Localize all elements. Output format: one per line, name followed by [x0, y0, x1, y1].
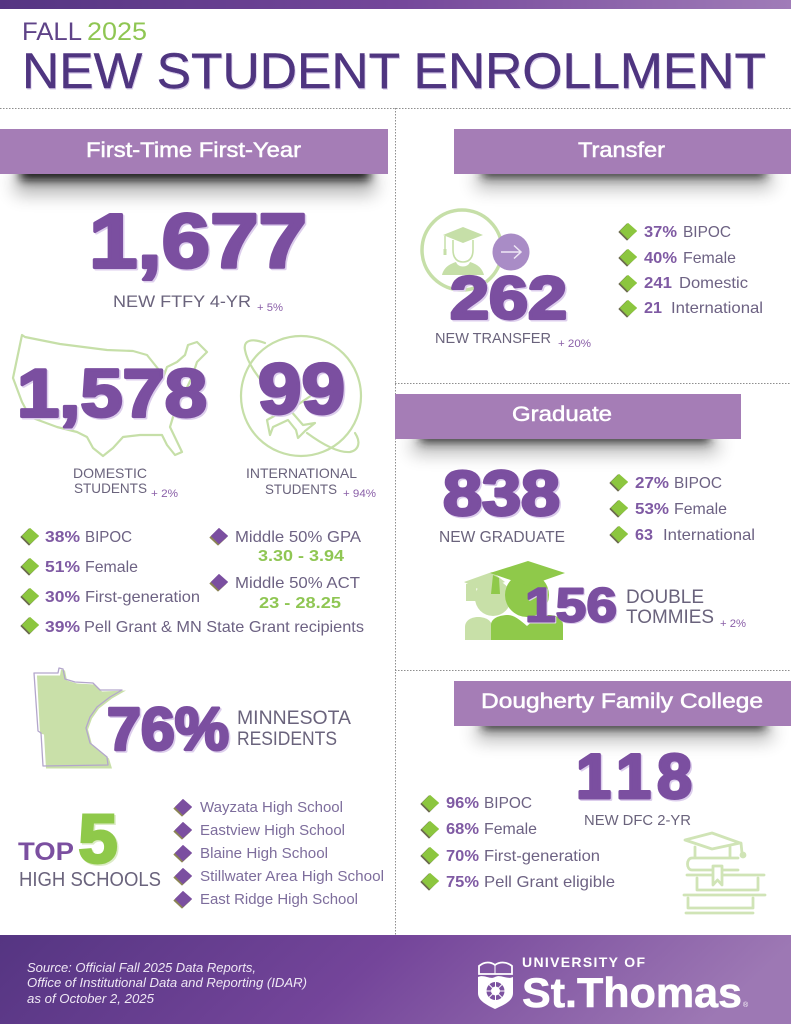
- label: domestic students: + 2%: [151, 488, 178, 500]
- icon: Minnesota map: [34, 668, 126, 768]
- stat list: transfer: 21: [644, 300, 662, 317]
- logo: University of St. Thomas: UNIVERSITY OF: [522, 954, 645, 970]
- logo: University of St. Thomas: [478, 954, 749, 1016]
- panel: first-time first-year: [0, 129, 388, 908]
- stat: middle 50% GPA and ACT: [210, 528, 361, 612]
- stat list: DFC: 96%: [446, 795, 479, 812]
- number 838: 838: [444, 460, 562, 530]
- stat list: DFC: 75%: [446, 874, 479, 891]
- label: new transfer: NEW TRANSFER: [435, 330, 551, 347]
- icon: graduate in circle: [422, 210, 502, 290]
- panel: transfer: [422, 129, 791, 350]
- stat list: demographics: Female: [85, 559, 138, 576]
- title: [22, 18, 767, 100]
- stat: 156 double tommies: 156: [525, 580, 617, 632]
- logo: University of St. Thomas: St.Thomas: [522, 969, 742, 1016]
- label: new graduate: NEW GRADUATE: [439, 529, 565, 546]
- section heading: Transfer: Transfer: [578, 139, 665, 162]
- stat list: demographics: 38%: [45, 529, 80, 546]
- label: new transfer: [435, 330, 591, 350]
- label: new FTFY: [113, 293, 283, 314]
- stat list: transfer: Domestic: [679, 275, 748, 292]
- stat list: demographics: Pell Grant & MN State Grant recipients: [84, 619, 364, 636]
- stat list: transfer: BIPOC: [683, 224, 731, 241]
- stat: 76% Minnesota residents: 76%: [108, 697, 230, 764]
- stat list: graduate: [610, 474, 755, 544]
- stat list: graduate: BIPOC: [674, 475, 722, 492]
- icon: two graduates: [464, 561, 565, 640]
- stat: 156 double tommies: 156: [526, 580, 618, 634]
- panel: graduate: [395, 394, 755, 640]
- source note: Source: Official Fall 2025 Data Reports,: [27, 960, 256, 975]
- label: new transfer: + 20%: [558, 338, 591, 350]
- number 838: 838: [443, 459, 560, 529]
- stat list: demographics: 39%: [45, 619, 80, 636]
- stat list: DFC: BIPOC: [484, 795, 532, 812]
- source note: as of October 2, 2025: [27, 991, 155, 1006]
- icon: arrow circle: [492, 234, 530, 270]
- stat list: DFC: Female: [484, 821, 537, 838]
- heading: top 5 high schools: 5: [80, 802, 119, 879]
- top banner: [0, 0, 791, 9]
- title: 2025: [87, 18, 147, 46]
- stat: middle 50% GPA and ACT: 23 - 28.25: [259, 595, 341, 612]
- stat: 156 double tommies: + 2%: [720, 618, 746, 630]
- title: NEW STUDENT ENROLLMENT: [22, 43, 766, 99]
- section heading: First-Time First-Year: First-Time First-Year: [86, 139, 301, 162]
- label: international students: + 94%: [343, 488, 376, 500]
- title: FALL: [22, 18, 82, 46]
- headline number 1,677: 1,677: [90, 200, 308, 286]
- number 99: 99: [258, 350, 345, 430]
- section heading: Graduate: [395, 394, 741, 453]
- stat list: transfer: 40%: [644, 250, 677, 267]
- label: international students: STUDENTS: [265, 481, 337, 497]
- stat: middle 50% GPA and ACT: 3.30 - 3.94: [258, 548, 344, 565]
- stat list: graduate: Female: [674, 501, 727, 518]
- stat list: transfer: [619, 224, 763, 317]
- number 1,578: 1,578: [18, 357, 208, 433]
- stat list: graduate: International: [663, 527, 755, 544]
- section heading: Graduate: Graduate: [512, 403, 612, 426]
- list: high schools: Eastview High School: [200, 822, 345, 839]
- heading: top 5 high schools: HIGH SCHOOLS: [19, 869, 161, 891]
- icon: US map outline: [13, 335, 207, 456]
- title: NEW STUDENT ENROLLMENT: [23, 44, 767, 100]
- stat list: transfer: Female: [683, 250, 736, 267]
- source note: Office of Institutional Data and Reporting (IDAR): [27, 975, 307, 990]
- stat list: graduate: 53%: [635, 501, 669, 518]
- section heading: Dougherty Family College: [454, 681, 791, 740]
- number 1,578: 1,578: [17, 356, 207, 432]
- icon: shield: [478, 962, 513, 1009]
- stat list: DFC: [421, 795, 615, 891]
- label: domestic students: DOMESTIC: [73, 465, 147, 481]
- number 118: 118: [578, 744, 694, 814]
- label: international students: [246, 465, 376, 500]
- heading: top 5 high schools: [18, 800, 161, 891]
- stat list: DFC: 70%: [446, 848, 479, 865]
- stat: 76% Minnesota residents: 76%: [107, 696, 229, 762]
- heading: top 5 high schools: 5: [78, 800, 118, 878]
- stat list: DFC: First-generation: [484, 848, 600, 865]
- stat: 76% Minnesota residents: [107, 696, 351, 764]
- stat: middle 50% GPA and ACT: Middle 50% GPA: [235, 529, 361, 546]
- stat: middle 50% GPA and ACT: Middle 50% ACT: [235, 575, 360, 592]
- number 262: 262: [450, 264, 567, 332]
- list: high schools: Stillwater Area High School: [200, 868, 384, 885]
- stat list: transfer: 37%: [644, 224, 677, 241]
- list: high schools: East Ridge High School: [200, 891, 358, 908]
- label: international students: INTERNATIONAL: [246, 465, 357, 481]
- stat list: transfer: 241: [644, 275, 672, 292]
- stat: 76% Minnesota residents: RESIDENTS: [237, 729, 337, 750]
- list: high schools: Blaine High School: [200, 845, 328, 862]
- source note: [27, 960, 307, 1006]
- section heading: First-Time First-Year: [0, 129, 388, 194]
- stat: 76% Minnesota residents: MINNESOTA: [237, 708, 351, 729]
- stat list: DFC: 68%: [446, 821, 479, 838]
- stat list: transfer: International: [671, 300, 763, 317]
- list: high schools: [174, 799, 384, 908]
- headline number 1,677: 1,677: [89, 198, 307, 284]
- number 118: 118: [576, 742, 692, 812]
- stat: 156 double tommies: DOUBLE: [626, 587, 704, 608]
- stat: 156 double tommies: TOMMIES: [626, 607, 714, 628]
- stat: 156 double tommies: [525, 580, 746, 634]
- panel: Dougherty Family College: [421, 681, 791, 913]
- logo: University of St. Thomas: ®: [743, 1001, 749, 1009]
- number 262: 262: [452, 266, 568, 333]
- section heading: Dougherty Family College: Dougherty Family College: [481, 690, 763, 713]
- label: new FTFY: + 5%: [257, 302, 283, 314]
- label: new DFC: NEW DFC 2-YR: [584, 812, 691, 829]
- label: domestic students: STUDENTS: [74, 480, 147, 496]
- stat list: graduate: 27%: [635, 475, 669, 492]
- heading: top 5 high schools: TOP: [18, 838, 74, 866]
- stat list: graduate: 63: [635, 527, 653, 544]
- stat list: demographics: 30%: [45, 589, 80, 606]
- label: domestic students: [73, 465, 178, 500]
- icon: books and cap: [684, 833, 765, 913]
- list: high schools: Wayzata High School: [200, 799, 343, 816]
- stat list: demographics: [21, 528, 364, 636]
- stat list: demographics: BIPOC: [85, 529, 132, 546]
- stat list: demographics: First-generation: [85, 589, 200, 606]
- stat list: DFC: Pell Grant eligible: [484, 874, 615, 891]
- section heading: Transfer: [454, 129, 791, 188]
- number 99: 99: [260, 352, 346, 431]
- stat list: demographics: 51%: [45, 559, 80, 576]
- label: new FTFY: NEW FTFY 4-YR: [113, 293, 251, 311]
- icon: globe and plane: [241, 336, 361, 456]
- footer band: [0, 935, 791, 1024]
